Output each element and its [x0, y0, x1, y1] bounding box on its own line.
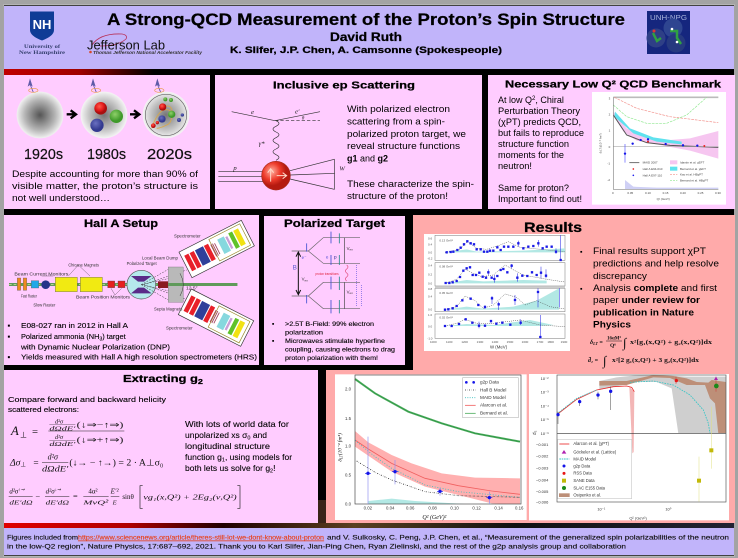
explanation text: both lets us solve for g	[185, 463, 270, 473]
asymmetry equations: A	[10, 424, 19, 438]
explanation text: Important to find out!	[498, 194, 582, 204]
bullet list: Analysis complete and first	[593, 283, 718, 293]
chart: neutron moment vs Q2: Bernard et al. χEFT	[680, 167, 706, 171]
energy level diagram: en	[350, 291, 353, 295]
logo: Jefferson Lab	[87, 34, 203, 55]
explanation text: structure function	[498, 139, 569, 149]
beamline diagram: 12.5°	[186, 285, 198, 291]
description text	[12, 169, 199, 203]
panel: extracting g2	[4, 370, 318, 523]
beamline diagram: Fast Raster	[21, 293, 37, 299]
asymmetry equations: MνQ²	[82, 500, 110, 507]
beamline diagram	[9, 220, 254, 346]
asymmetry equations: (↓⇒+↑⇒)	[77, 435, 124, 444]
explanation text: 0	[247, 436, 250, 442]
chart: neutron moment vs Q2	[592, 92, 726, 205]
beamline diagram: Chicane Magnets	[68, 263, 99, 269]
heading: Inclusive ep Scattering	[273, 80, 415, 92]
legend: Alarcon et al. (χPT)	[573, 441, 610, 446]
asymmetry equations: E	[112, 500, 117, 507]
chart: d2 vs Q2: Q² (GeV²)	[629, 515, 647, 520]
chart: d2 vs Q2: 10⁻⁶	[541, 431, 549, 436]
bullet list: polarization	[285, 330, 323, 336]
energy level diagram: e	[326, 254, 329, 259]
legend: Alarcon et al.	[480, 403, 507, 408]
chart: d2 vs Q2	[529, 374, 729, 520]
asymmetry equations: −	[35, 492, 40, 501]
legend: Göckeler et al. (Lattice)	[573, 449, 617, 454]
explanation text: function g	[185, 452, 222, 462]
beamline diagram: Local Beam Dump	[142, 256, 178, 262]
chart: d2 vs Q2: −0.003	[536, 465, 549, 470]
legend	[463, 378, 518, 418]
chart: delta LT vs Q2: 0.5	[345, 473, 352, 478]
footer: references and acknowledgements	[4, 528, 734, 555]
chart: structure function vs W, four Q2 bins: 0.6	[428, 236, 432, 240]
footer: references and acknowledgements: in the low-Q2 region”, Nature Physics, 17:687–692, 2021. Thank you to Karl Slifer, Jian-Ping Chen, Ryan Zielinski, and the rest of the g2p analysis group and collaboration	[7, 544, 626, 550]
explanation text: scattering from a spin-	[347, 116, 445, 126]
bullet list: Yields measured with Hall A high resolution spectrometers (HRS)	[21, 352, 257, 362]
chart: structure function vs W, four Q2 bins: 1400	[492, 340, 499, 344]
chart: structure function vs W, four Q2 bins: 0.05 GeV²	[439, 291, 453, 295]
chart: delta LT vs Q2: 0.12	[472, 506, 481, 511]
explanation text: , Chiral	[535, 95, 564, 105]
equations: delta LT and d2: =	[598, 340, 603, 346]
explanation text: 1	[222, 458, 225, 464]
equations: delta LT and d2: ∫	[622, 335, 628, 351]
asymmetry equations: ↓⇒	[55, 488, 62, 493]
explanation text: structure of the proton!	[347, 191, 448, 201]
energy level diagram: en	[350, 248, 353, 252]
bullet list: Microwaves stimulate hyperfine	[285, 338, 385, 345]
bullet list: ▪	[272, 321, 274, 328]
chart: structure function vs W, four Q2 bins: 1900	[561, 340, 568, 344]
bullet list	[272, 321, 395, 362]
energy level diagram: V	[347, 246, 350, 251]
asymmetry equations: =	[73, 492, 78, 501]
chart: structure function vs W, four Q2 bins: 0.0	[428, 324, 432, 328]
chart: structure function vs W, four Q2 bins: 0.0	[428, 281, 432, 285]
description text: Despite accounting for more than 90% of	[12, 169, 199, 179]
chart: delta LT vs Q2	[335, 374, 527, 521]
chart: delta LT vs Q2: 0.02	[364, 506, 373, 511]
asymmetry equations: d²σ	[9, 487, 18, 495]
bullet list: ▪	[8, 352, 10, 362]
Feynman diagram: θ	[302, 116, 305, 121]
equations: delta LT and d2: ∫	[602, 353, 608, 369]
Feynman diagram: p	[232, 165, 237, 172]
asymmetry equations: (↓⇒−↑⇒)	[77, 421, 124, 430]
legend: SLAC E155 Data	[573, 485, 606, 490]
equations: delta LT and d2: x²[2 g₁(x,Q²) + 3 g₂(x,Q²)]dx	[612, 357, 699, 364]
chart: neutron moment vs Q2: 0.15	[663, 191, 669, 195]
explanation text: These characterize the spin-	[347, 179, 474, 189]
lower spectrometer	[178, 289, 254, 346]
Feynman diagram: W	[339, 166, 346, 173]
chart: delta LT vs Q2: 0.04	[386, 506, 395, 511]
asymmetry equations: dΩdE′	[49, 442, 77, 448]
asymmetry equations: Δσ	[10, 457, 20, 468]
footer: references and acknowledgements: https://www.sciencenews.org/article/theres-still-lot-we-dont-know-about-proton	[78, 534, 324, 542]
panel: proton structure timeline	[4, 75, 210, 209]
data points	[445, 241, 561, 337]
asymmetry equations: d²σ	[55, 418, 64, 425]
explanation text	[498, 95, 584, 204]
legend: Bernard et al.	[480, 411, 508, 416]
chart: delta LT vs Q2: (10⁻⁴ fm⁴)	[337, 433, 344, 455]
logo: University of New Hampshire	[19, 12, 66, 56]
chart: delta LT vs Q2: δ	[338, 459, 344, 462]
asymmetry equations: ↑⇒	[18, 488, 26, 493]
beamline diagram: Spectrometer	[174, 234, 201, 240]
chart: d2 vs Q2: −0.004	[536, 477, 549, 482]
energy level diagram: B	[293, 264, 297, 271]
chart: structure function vs W, four Q2 bins: 0.4	[428, 243, 432, 247]
explanation text: reveal structure functions	[347, 141, 461, 151]
chart: d2 vs Q2: 10⁻²	[541, 376, 549, 381]
heading: Extracting g	[123, 374, 181, 385]
chart: structure function vs W, four Q2 bins	[424, 234, 570, 351]
bullet list: paper under review for	[593, 295, 701, 305]
heading: 2	[198, 379, 203, 386]
legend: g2p Data	[573, 463, 591, 468]
chart: neutron moment vs Q2: 1	[609, 129, 611, 133]
logo: Jefferson Lab: Thomas Jefferson National Accelerator Facility	[93, 50, 203, 55]
equations: delta LT and d2: δ	[590, 340, 593, 346]
chart: neutron moment vs Q2: -2	[607, 178, 610, 182]
bullet list	[8, 321, 257, 362]
chart: neutron moment vs Q2: δ₍LT₎(10⁻⁴ fm⁴)	[598, 133, 602, 153]
chart: structure function vs W, four Q2 bins: -0.2	[427, 256, 433, 260]
panel: low Q2 QCD benchmark	[488, 75, 735, 209]
legend: Hall B Model	[480, 387, 506, 392]
explanation text: polarized proton target, we	[347, 129, 466, 139]
chart: delta LT vs Q2: 2.0	[345, 387, 352, 392]
explanation text: With lots of world data for	[185, 419, 289, 429]
title: A Strong-QCD Measurement of the Proton’s Spin Structure	[107, 11, 625, 29]
bullet list: Polarized ammonia (NH	[21, 332, 99, 341]
era labels: 1920s	[24, 147, 63, 163]
asymmetry equations: d²σ	[46, 487, 55, 495]
chart: neutron moment vs Q2: 3	[609, 96, 611, 100]
logo: University of New Hampshire: New Hampshire	[19, 51, 66, 56]
logo: University of New Hampshire: NH	[33, 17, 51, 32]
authors: K. Slifer, J.P. Chen, A. Camsonne (Spokespeople)	[230, 45, 502, 55]
bullet list: predictions and help resolve	[593, 258, 719, 268]
chart: delta LT vs Q2: 0.16	[515, 506, 524, 511]
bullet list: publication in Nature	[593, 308, 694, 318]
explanation text: longitudinal structure	[185, 441, 270, 451]
asymmetry equations: d²σ	[55, 434, 64, 441]
chart: delta LT vs Q2: 0.06	[406, 506, 415, 511]
chart: neutron moment vs Q2: MAID 2007	[643, 161, 658, 165]
bullet list: coupling, causing electrons to drag	[285, 346, 395, 354]
explanation text	[185, 419, 292, 474]
explanation text: At low Q	[498, 95, 532, 105]
explanation text: Perturbation Theory	[498, 106, 581, 116]
asymmetry equations: dΩdE′	[42, 464, 69, 473]
Feynman diagram: e′	[295, 108, 300, 115]
Feynman diagram	[218, 108, 346, 190]
chart: structure function vs W, four Q2 bins: 0.02 GeV²	[439, 316, 453, 320]
panel: inclusive ep scattering	[215, 75, 482, 209]
explanation text: unpolarized xs σ	[185, 430, 247, 440]
chart: structure function vs W, four Q2 bins: 1700	[537, 340, 544, 344]
equations: delta LT and d2: x²[g₁(x,Q²) + g₂(x,Q²)]dx	[630, 339, 712, 346]
explanation text: and	[250, 430, 267, 440]
panel: Hall A setup	[4, 215, 259, 365]
chart: d2 vs Q2: −0.002	[536, 454, 549, 459]
energy level diagram: V	[347, 289, 350, 294]
energy level diagram: p	[334, 255, 337, 260]
equations: delta LT and d2: Q⁶	[610, 343, 616, 349]
chart: d2 vs Q2: 10⁻¹	[597, 507, 606, 512]
legend: MAID Model	[480, 395, 506, 400]
chart: structure function vs W, four Q2 bins: -1.0	[427, 337, 433, 341]
chart: structure function vs W, four Q2 bins: 0.4	[428, 264, 432, 268]
chart: neutron moment vs Q2: Hall A E94-010	[643, 167, 663, 171]
bullet list: ▪	[580, 249, 583, 256]
energy level diagram: en	[305, 278, 308, 282]
chart: neutron moment vs Q2: 0	[609, 145, 611, 149]
chart: neutron moment vs Q2: 0.10	[645, 191, 651, 195]
logo: University of New Hampshire: University of	[24, 45, 60, 50]
equations: delta LT and d2	[588, 335, 712, 369]
asymmetry equations: E′²	[110, 487, 119, 495]
chart: delta LT vs Q2: 1.5	[345, 416, 352, 421]
heading: Results	[524, 219, 582, 235]
heading: Polarized Target	[284, 218, 385, 230]
chart: structure function vs W, four Q2 bins: 0.13 GeV²	[439, 238, 453, 242]
intro text: Compare forward and backward helicity	[8, 395, 166, 404]
chart: structure function vs W, four Q2 bins: 1100	[446, 340, 453, 344]
footer: references and acknowledgements: Figures included from	[7, 534, 79, 542]
bullet list: >2.5T B-Field: 99% electron	[285, 321, 374, 328]
chart: neutron moment vs Q2: 0.25	[698, 191, 704, 195]
chart: delta LT vs Q2: LT	[340, 454, 344, 460]
chart: structure function vs W, four Q2 bins: 1200	[461, 340, 468, 344]
proton diagrams over three eras	[17, 78, 189, 138]
equations: delta LT and d2: LT	[592, 341, 598, 346]
asymmetry equations: dE′dΩ	[46, 500, 69, 507]
bullet list: ▪	[580, 286, 583, 293]
asymmetry equations: =	[32, 427, 38, 438]
logo: UNH-NPG: UNH-NPG	[650, 15, 687, 22]
era labels: 2020s	[147, 147, 192, 163]
presenter name: David Ruth	[330, 32, 402, 44]
era labels: 1980s	[87, 147, 126, 163]
bullet list: Final results support χPT	[593, 246, 707, 256]
explanation text: g1 and g2	[347, 154, 388, 164]
bullet list: 3	[99, 336, 102, 342]
chart: structure function vs W, four Q2 bins: 0.08 GeV²	[439, 264, 453, 268]
era labels	[24, 147, 192, 163]
chart: d2 vs Q2: 10⁻⁴	[541, 403, 549, 408]
bullet list: discrepancy	[593, 271, 648, 281]
bullet list: ▪	[8, 321, 10, 330]
logo: Jefferson Lab: Jefferson Lab	[87, 38, 165, 52]
chart: neutron moment vs Q2: Idantin et al. χEFT	[680, 161, 704, 165]
beamline diagram: Slow Raster	[33, 302, 56, 308]
energy level diagram: V	[302, 277, 305, 282]
intro text: scattered electrons:	[8, 405, 79, 414]
asymmetry equations	[9, 418, 240, 508]
bullet list: ▪	[272, 338, 274, 345]
chart: structure function vs W, four Q2 bins: 1800	[547, 340, 554, 344]
asymmetry equations: d²σ	[48, 452, 59, 461]
chart: neutron moment vs Q2: 0	[612, 191, 614, 195]
explanation text: (χPT) predicts QCD,	[498, 117, 581, 127]
chart: delta LT vs Q2: Q² (GeV)²	[422, 514, 447, 521]
asymmetry equations: =	[33, 458, 39, 468]
chart: structure function vs W, four Q2 bins: 0.4	[428, 294, 432, 298]
chart: delta LT vs Q2: 1.0	[345, 444, 352, 449]
legend: g2p Data	[480, 380, 499, 385]
chart: neutron moment vs Q2: 0.05	[627, 191, 633, 195]
chart: delta LT vs Q2: 0.08	[428, 506, 437, 511]
explanation text: !	[273, 463, 275, 473]
chart: structure function vs W, four Q2 bins: 0.0	[428, 250, 432, 254]
chart: d2 vs Q2: −0.005	[536, 489, 549, 494]
chart: structure function vs W, four Q2 bins: 1300	[477, 340, 484, 344]
explanation text: but fails to reproduce	[498, 128, 584, 138]
chart: structure function vs W, four Q2 bins: 1500	[507, 340, 514, 344]
bullet list	[580, 246, 719, 330]
chart: neutron moment vs Q2: 0.30	[715, 191, 721, 195]
explanation text: moments for the	[498, 150, 564, 160]
energy level diagram	[292, 232, 362, 313]
bullet list: E08-027 ran in 2012 in Hall A	[21, 321, 128, 330]
chart: structure function vs W, four Q2 bins: W (MeV)	[490, 345, 508, 350]
energy level diagram: proton transitions	[315, 272, 339, 276]
chart: neutron moment vs Q2: 2	[609, 112, 611, 116]
bullet list: with Dynamic Nuclear Polarization (DNP)	[20, 342, 170, 352]
explanation text: , using models for	[225, 452, 292, 462]
asymmetry equations: sinθ	[122, 493, 134, 501]
description text: not well understood…	[12, 193, 110, 203]
chart: neutron moment vs Q2: Bernard et al. HBχPT	[680, 179, 708, 183]
equations: delta LT and d2: d̄₂ =	[588, 357, 599, 364]
legend: RSS Data	[573, 471, 593, 476]
chart: delta LT vs Q2: 0.0	[345, 502, 352, 507]
Feynman diagram: e	[251, 109, 254, 116]
chart: structure function vs W, four Q2 bins: 0.8	[428, 287, 432, 291]
panel: polarized target	[264, 216, 405, 365]
beamline diagram: Spectrometer	[166, 325, 193, 331]
chart: neutron moment vs Q2: Kao et al. HBχPT	[680, 172, 703, 176]
asymmetry equations: νg₁(x,Q²) + 2Eg₂(ν,Q²)	[143, 492, 237, 501]
asymmetry equations: ⊥	[20, 431, 27, 440]
explanation text: With polarized electron	[347, 104, 450, 114]
chart: delta LT vs Q2: 0.10	[450, 506, 459, 511]
asymmetry equations: dΩdE′	[49, 426, 77, 432]
beamline diagram: Septa Magnets	[154, 307, 183, 313]
chart: structure function vs W, four Q2 bins: 1000	[430, 340, 437, 344]
bullet list: ▪	[8, 332, 10, 341]
legend	[558, 439, 632, 499]
chart: d2 vs Q2: 10⁻⁵	[541, 417, 549, 422]
chart: structure function vs W, four Q2 bins: 1.0	[428, 313, 432, 317]
chart: structure function vs W, four Q2 bins: 1600	[522, 340, 529, 344]
logo: UNH-NPG	[646, 11, 690, 54]
legend: SANE Data	[573, 478, 595, 483]
description text: visible matter, the proton’s structure is	[12, 181, 199, 191]
upper spectrometer	[179, 220, 254, 278]
asymmetry equations: ⊥	[20, 462, 26, 469]
explanation text: 2	[270, 468, 273, 474]
beamline diagram: Polarized Target	[127, 261, 157, 267]
heading: Necessary Low Q² QCD Benchmark	[505, 80, 722, 90]
chart: delta LT vs Q2: 0.14	[494, 506, 503, 511]
chart: d2 vs Q2: 10⁻³	[541, 389, 549, 394]
bullet list: Physics	[593, 320, 631, 330]
asymmetry equations: 4α²	[88, 487, 98, 495]
footer: references and acknowledgements: and V. Sulkosky, C. Peng, J.P. Chen, et al., “Measurement of the generalized spin polarizabilities of the neutron	[327, 534, 729, 542]
intro text	[8, 395, 166, 414]
chart: d2 vs Q2: −0.001	[536, 442, 549, 447]
equations: delta LT and d2: 16αM²	[607, 336, 621, 342]
chart: neutron moment vs Q2: Hall A E97-110	[643, 173, 663, 177]
chart: structure function vs W, four Q2 bins: 0.0	[428, 308, 432, 312]
legend: MAID Model	[573, 457, 596, 462]
bullet list: ) target	[102, 332, 126, 341]
explanation text: neutron!	[498, 161, 532, 171]
chart: neutron moment vs Q2: -1	[607, 162, 610, 166]
chart: d2 vs Q2: −0.006	[536, 500, 549, 505]
chart: neutron moment vs Q2: Q² (GeV²)	[657, 197, 670, 201]
header band	[4, 6, 734, 69]
bullet list: proton polarization with them!	[285, 355, 378, 362]
Feynman diagram: γ*	[259, 141, 265, 148]
asymmetry equations: dE′dΩ	[9, 500, 33, 507]
panel: results	[326, 215, 735, 523]
beamline diagram: Beam Current Monitors	[14, 272, 69, 278]
explanation text: 2	[532, 96, 536, 102]
chart: d2 vs Q2: d̄₂	[532, 430, 537, 435]
heading: Hall A Setup	[84, 218, 158, 230]
chart: neutron moment vs Q2: 0.20	[680, 191, 686, 195]
energy level diagram: e⁻	[302, 255, 306, 260]
chart: structure function vs W, four Q2 bins: 0.2	[428, 273, 432, 277]
chart: d2 vs Q2: 10⁰	[665, 507, 672, 512]
asymmetry equations: (↓→ − ↑→) = 2 · A⊥σ₀	[69, 457, 163, 467]
legend: Osipenko et al.	[573, 493, 601, 498]
explanation text	[347, 104, 474, 201]
beamline diagram: Beam Position Monitors	[76, 295, 131, 301]
explanation text: Same for proton?	[498, 183, 569, 193]
